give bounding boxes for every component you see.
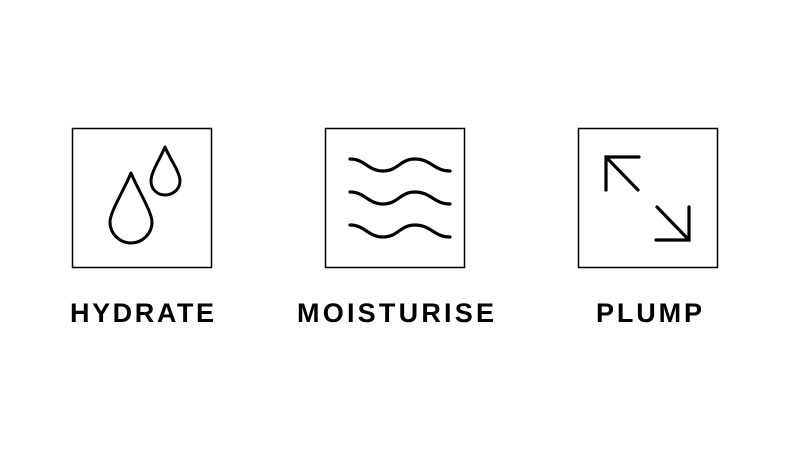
- panel: moisturise: [326, 128, 464, 268]
- label: plump: PLUMP: [596, 298, 702, 328]
- label: moisturise: MOISTURISE: [297, 298, 494, 328]
- icon: waves: [350, 159, 450, 237]
- panel: hydrate: [72, 128, 212, 268]
- icon: expand arrows: [606, 157, 689, 240]
- panel: plump: [578, 128, 718, 268]
- label: hydrate: HYDRATE: [70, 298, 214, 328]
- icon: water drops: [110, 147, 180, 243]
